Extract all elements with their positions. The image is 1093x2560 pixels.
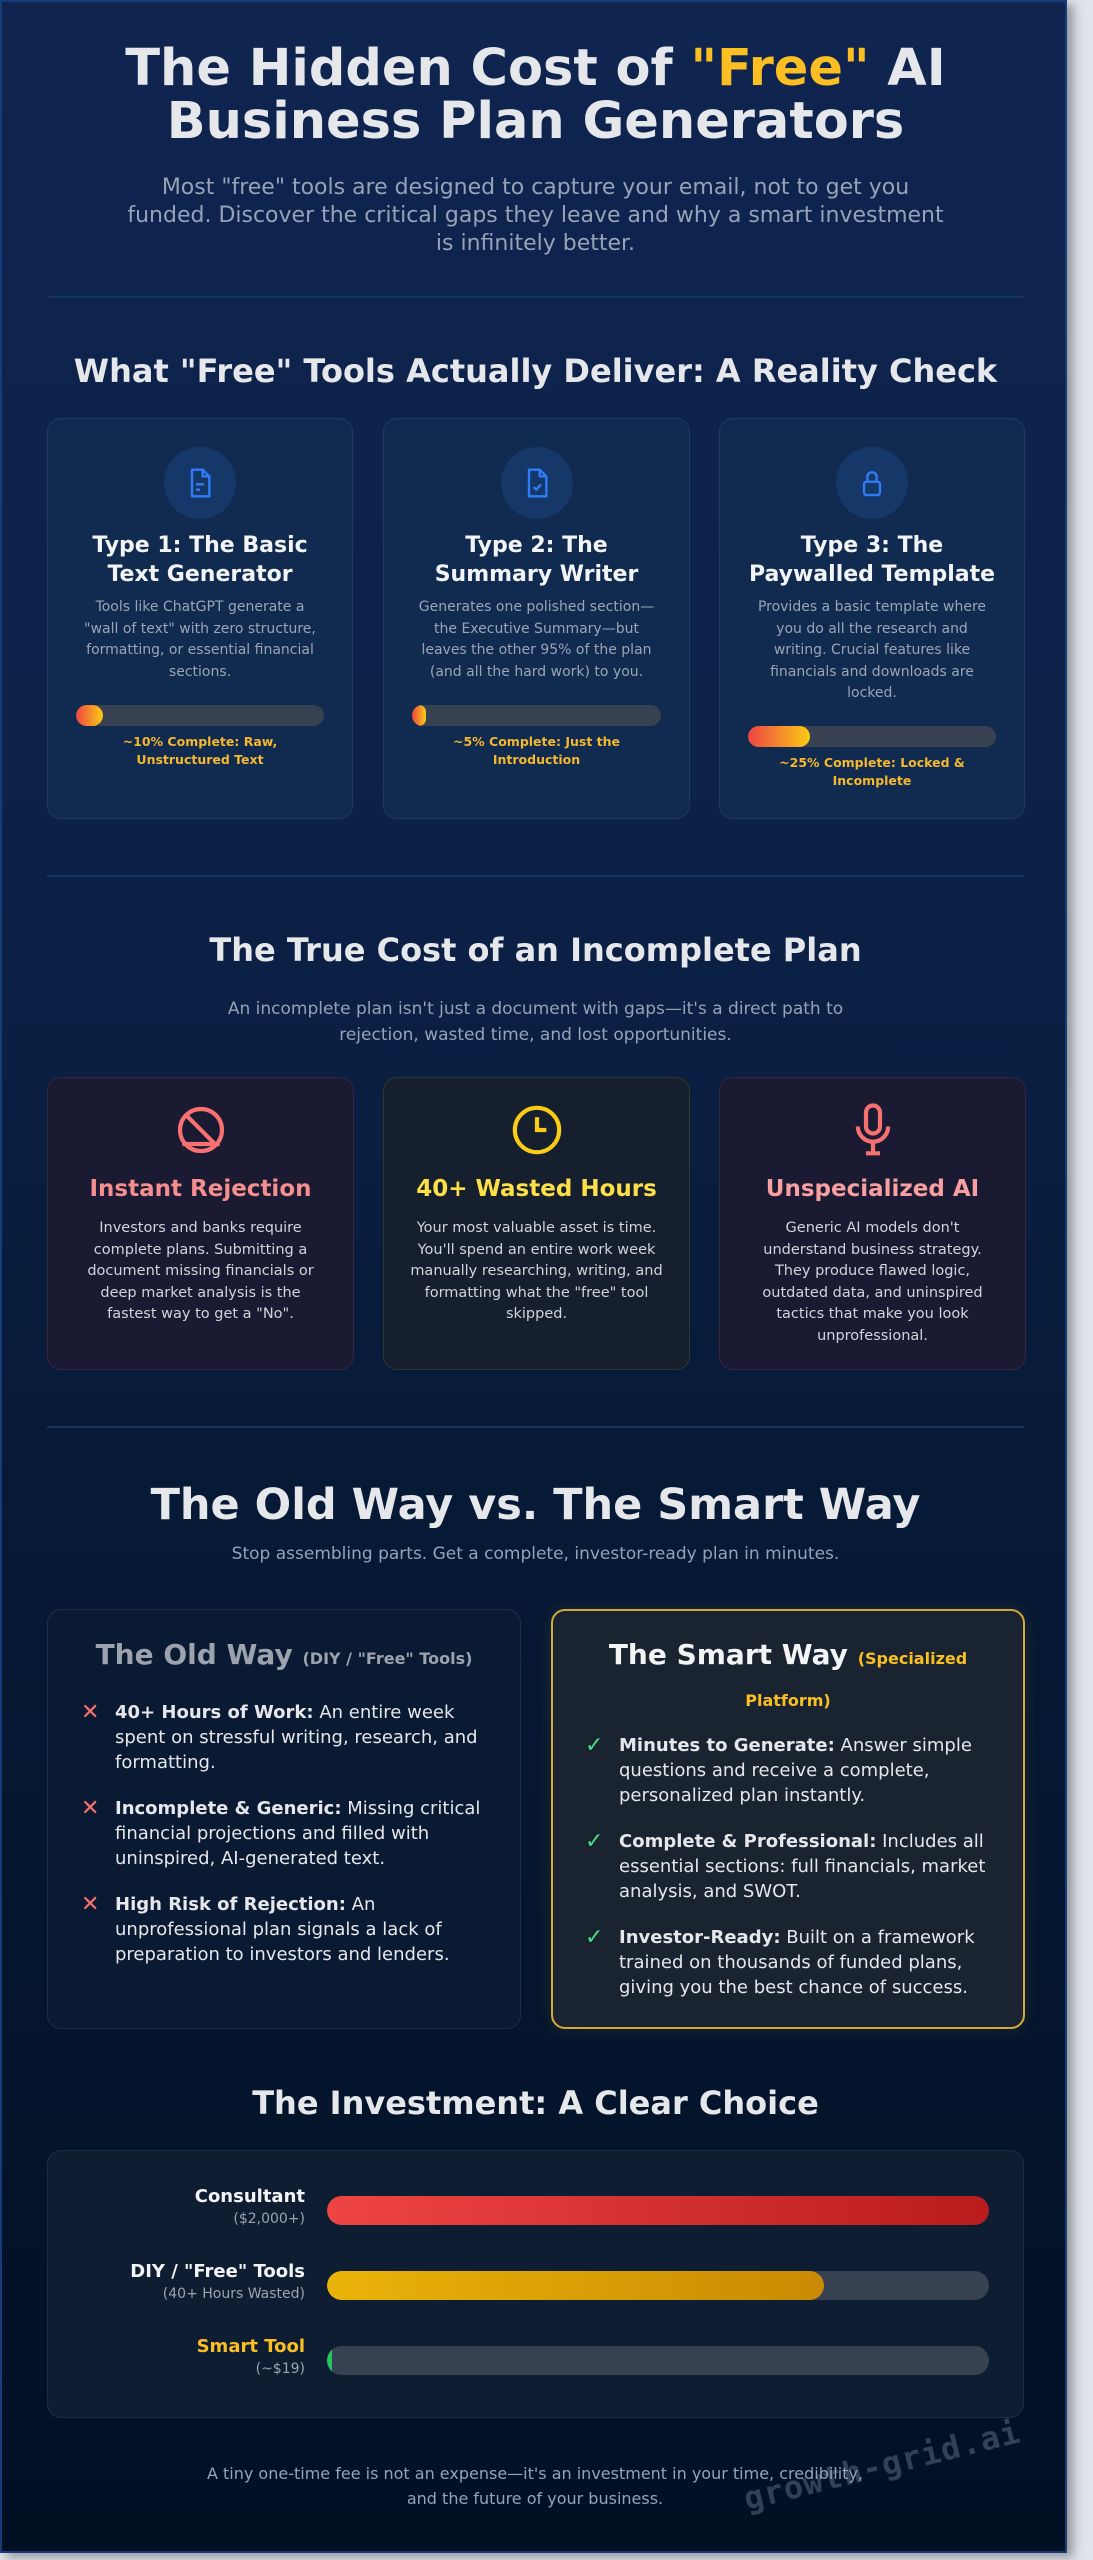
progress label: Incomplete: [833, 773, 911, 788]
panel: old way: ✕: [81, 1700, 99, 1725]
item: complete: [585, 1829, 985, 1902]
panel: smart way: ✓: [585, 1829, 603, 1854]
progress label: [453, 734, 620, 767]
subtitle: Most "free" tools are designed to capture your email, not to get you: [162, 175, 909, 200]
card title: Summary Writer: [435, 562, 638, 587]
subtitle: [127, 175, 944, 256]
row: diy: (40+ Hours Wasted): [163, 2286, 305, 2302]
panel: smart way: ✓: [585, 1733, 603, 1758]
panel: unspecialized ai: [719, 1077, 1026, 1370]
description: Provides a basic template where you do all the research and writing. Crucial features like financials and downloads are locked.: [758, 599, 986, 701]
panel: type 3: [719, 418, 1025, 819]
card title: Type 1: The Basic: [92, 533, 308, 558]
panel: instant rejection: [47, 1077, 354, 1370]
panel: old way: [47, 1609, 521, 2029]
item: investor ready: [585, 1925, 975, 1998]
title: [125, 39, 946, 151]
item: minutes: [585, 1733, 972, 1806]
subtitle: funded. Discover the critical gaps they leave and why a smart investment: [127, 203, 944, 228]
heading: investment: The Investment: A Clear Choice: [252, 2084, 819, 2122]
progress bar 25%: [748, 726, 996, 747]
card title: Paywalled Template: [749, 562, 995, 587]
icon: rejection: [178, 1106, 224, 1154]
progress bar 5%: [412, 705, 661, 726]
panel: old way: ✕: [81, 1796, 99, 1821]
panel: smart way: Complete & Professional: Includes all essential sections: full financials, market analysis, and SWOT.: [619, 1831, 985, 1902]
footer text: A tiny one-time fee is not an expense—it's an investment in your time, credibility, and the future of your business.: [207, 2464, 863, 2508]
card title: Type 3: The: [801, 533, 943, 558]
progress label: Introduction: [493, 752, 580, 767]
item: 40+ hours: [81, 1700, 478, 1773]
description: Investors and banks require complete plans. Submitting a document missing financials or deep market analysis is the fastest way to get a "No".: [87, 1220, 314, 1322]
watermark: growth-grid.ai: [740, 2412, 1024, 2518]
heading: old vs smart: The Old Way vs. The Smart Way: [151, 1480, 920, 1530]
card title: Instant Rejection: [90, 1176, 312, 1202]
row: consultant: Consultant: [195, 2186, 305, 2207]
card title: [435, 533, 638, 587]
panel: old way: 40+ Hours of Work: An entire week spent on stressful writing, research, and formatting.: [115, 1702, 478, 1773]
panel heading: The Old Way (DIY / "Free" Tools): [96, 1638, 472, 1671]
title: Business Plan Generators: [167, 92, 904, 151]
icon: document check: [500, 447, 572, 519]
heading: reality check: What "Free" Tools Actually Deliver: A Reality Check: [74, 352, 997, 390]
card title: Type 2: The: [465, 533, 608, 558]
row: smart tool: Smart Tool: [197, 2336, 305, 2357]
icon: lock: [836, 447, 908, 519]
panel: smart way: Minutes to Generate: Answer simple questions and receive a complete, personalized plan instantly.: [619, 1735, 972, 1806]
card title: [749, 533, 995, 587]
panel: old way: Incomplete & Generic: Missing critical financial projections and filled with uninspired, AI-generated text.: [115, 1798, 480, 1869]
progress label: ~10% Complete: Raw,: [123, 734, 277, 749]
panel: smart way: [551, 1609, 1025, 2029]
description: Tools like ChatGPT generate a "wall of text" with zero structure, formatting, or essential financial sections.: [84, 599, 316, 680]
icon: microphone: [856, 1103, 890, 1156]
row: diy: DIY / "Free" Tools: [130, 2261, 305, 2282]
panel: old way: ✕: [81, 1892, 99, 1917]
card title: Text Generator: [107, 562, 293, 587]
bar chart: [47, 2150, 1024, 2418]
row: diy: [130, 2261, 989, 2302]
panel: type 2: [383, 418, 690, 819]
card title: Unspecialized AI: [766, 1176, 979, 1202]
row: consultant: [195, 2186, 989, 2227]
panel heading: The Smart Way (Specialized Platform): [609, 1638, 967, 1710]
icon: document: [164, 447, 236, 519]
progress bar 10%: [76, 705, 324, 726]
card title: [92, 533, 308, 587]
panel: smart way: Investor-Ready: Built on a framework trained on thousands of funded plans, giving you the best chance of success.: [619, 1927, 975, 1998]
description: Generic AI models don't understand business strategy. They produce flawed logic, outdated data, and uninspired tactics that make you look unprofessional.: [762, 1220, 983, 1344]
subtitle: is infinitely better.: [436, 231, 635, 256]
panel: old way: High Risk of Rejection: An unprofessional plan signals a lack of preparation to investors and lenders.: [115, 1894, 450, 1965]
description: Generates one polished section—the Executive Summary—but leaves the other 95% of the plan (and all the hard work) to you.: [419, 599, 654, 680]
card title: 40+ Wasted Hours: [416, 1176, 657, 1202]
progress label: ~5% Complete: Just the: [453, 734, 620, 749]
heading: true cost: The True Cost of an Incomplete Plan: [209, 931, 862, 969]
item: risk: [81, 1892, 450, 1965]
row: smart tool: [197, 2336, 989, 2377]
item: incomplete: [81, 1796, 480, 1869]
subtitle: true cost: An incomplete plan isn't just a document with gaps—it's a direct path to rejection, wasted time, and lost opportunities.: [228, 999, 843, 1045]
progress label: Unstructured Text: [136, 752, 264, 767]
description: Your most valuable asset is time. You'll spend an entire work week manually researching, writing, and formatting what the "free" tool skipped.: [410, 1220, 663, 1322]
progress label: ~25% Complete: Locked &: [779, 755, 965, 770]
row: smart tool: (~$19): [256, 2361, 305, 2377]
subtitle: old vs smart: Stop assembling parts. Get a complete, investor-ready plan in minutes.: [232, 1544, 839, 1564]
panel: wasted hours: [383, 1077, 690, 1370]
row: consultant: ($2,000+): [233, 2211, 305, 2227]
icon: clock: [512, 1106, 562, 1154]
progress label: [779, 755, 965, 788]
panel: smart way: ✓: [585, 1925, 603, 1950]
progress label: [123, 734, 277, 767]
panel: type 1: [47, 418, 353, 819]
title: The Hidden Cost of "Free" AI: [125, 39, 946, 98]
